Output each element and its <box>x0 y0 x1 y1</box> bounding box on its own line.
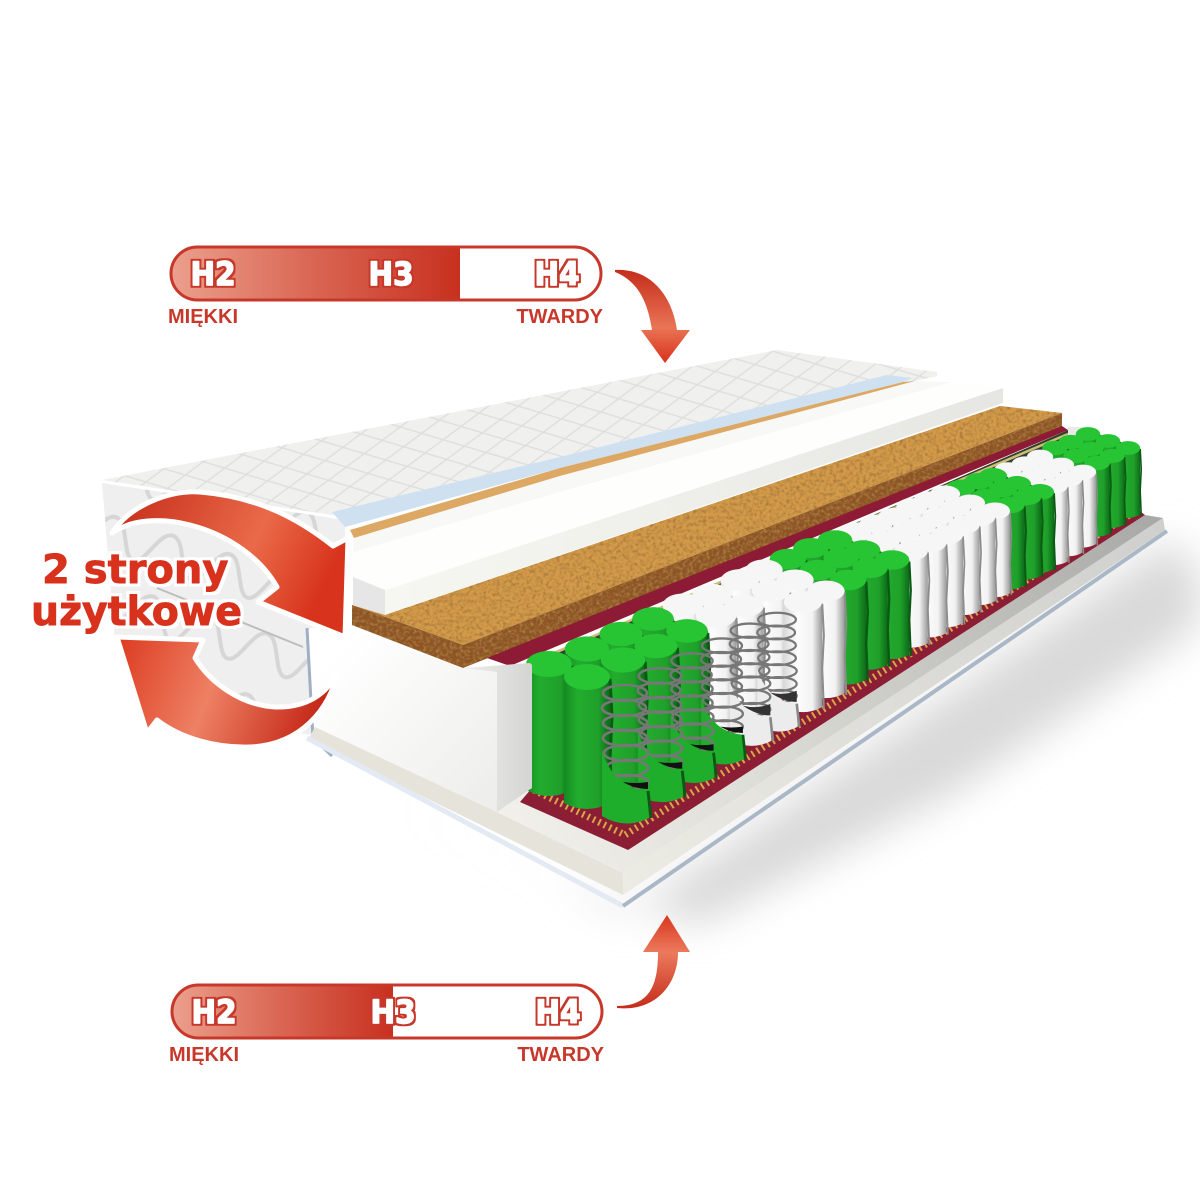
block return face <box>463 663 532 812</box>
scale captions <box>168 306 604 328</box>
label: 2 strony użytkowe: użytkowe <box>31 589 242 635</box>
pocket springs <box>526 427 1141 824</box>
maroon upper layer <box>487 426 1068 666</box>
floor stripes <box>534 512 1134 835</box>
quilted top cover <box>102 350 937 517</box>
firmness labels: H4 <box>536 993 580 1031</box>
gold upper stripe <box>528 434 1068 664</box>
mattress shadow <box>400 540 1200 925</box>
arrow: up to bottom side <box>617 915 690 1008</box>
firmness labels: H3 <box>368 255 414 293</box>
label: 2 strony użytkowe: 2 strony <box>42 547 228 593</box>
scale pill <box>172 985 602 1038</box>
arrow: down to top side <box>615 270 690 363</box>
rotation arrow: bottom <box>117 637 338 747</box>
maroon floor <box>520 505 1145 850</box>
base left band <box>308 727 623 895</box>
bottom firmness scale <box>169 985 605 1066</box>
blue cover layer <box>332 375 913 527</box>
scale captions: TWARDY <box>517 1044 605 1066</box>
white side block <box>310 628 497 812</box>
firmness labels: H2 <box>192 993 236 1031</box>
label: 2 strony użytkowe <box>31 547 242 635</box>
scale captions: MIĘKKI <box>169 1044 239 1066</box>
interior of spring unit <box>530 430 1140 840</box>
base top surface <box>497 515 1163 873</box>
coir layer <box>352 406 1062 668</box>
base piping left <box>307 738 623 906</box>
base front face <box>623 518 1165 895</box>
base piping right <box>623 531 1167 906</box>
top firmness scale <box>168 247 604 328</box>
firmness labels: H2 <box>190 255 236 293</box>
side zipper <box>307 628 332 756</box>
end block <box>1068 427 1084 438</box>
firmness labels: H3 <box>370 993 416 1031</box>
side panel seam <box>157 588 303 647</box>
firmness labels: H4 <box>534 255 580 293</box>
scale captions <box>169 1044 605 1066</box>
white fuzzy layer <box>353 381 952 552</box>
firmness labels <box>190 255 580 293</box>
quilted side panel <box>102 483 345 735</box>
foam layer <box>353 382 1003 615</box>
rotation arrow: top <box>112 492 348 637</box>
scale captions: MIĘKKI <box>168 306 238 328</box>
gold cover layer <box>350 381 915 538</box>
scale captions: TWARDY <box>516 306 604 328</box>
mattress cross-section <box>102 350 1167 906</box>
firmness labels <box>192 993 580 1031</box>
scale pill <box>171 247 601 300</box>
